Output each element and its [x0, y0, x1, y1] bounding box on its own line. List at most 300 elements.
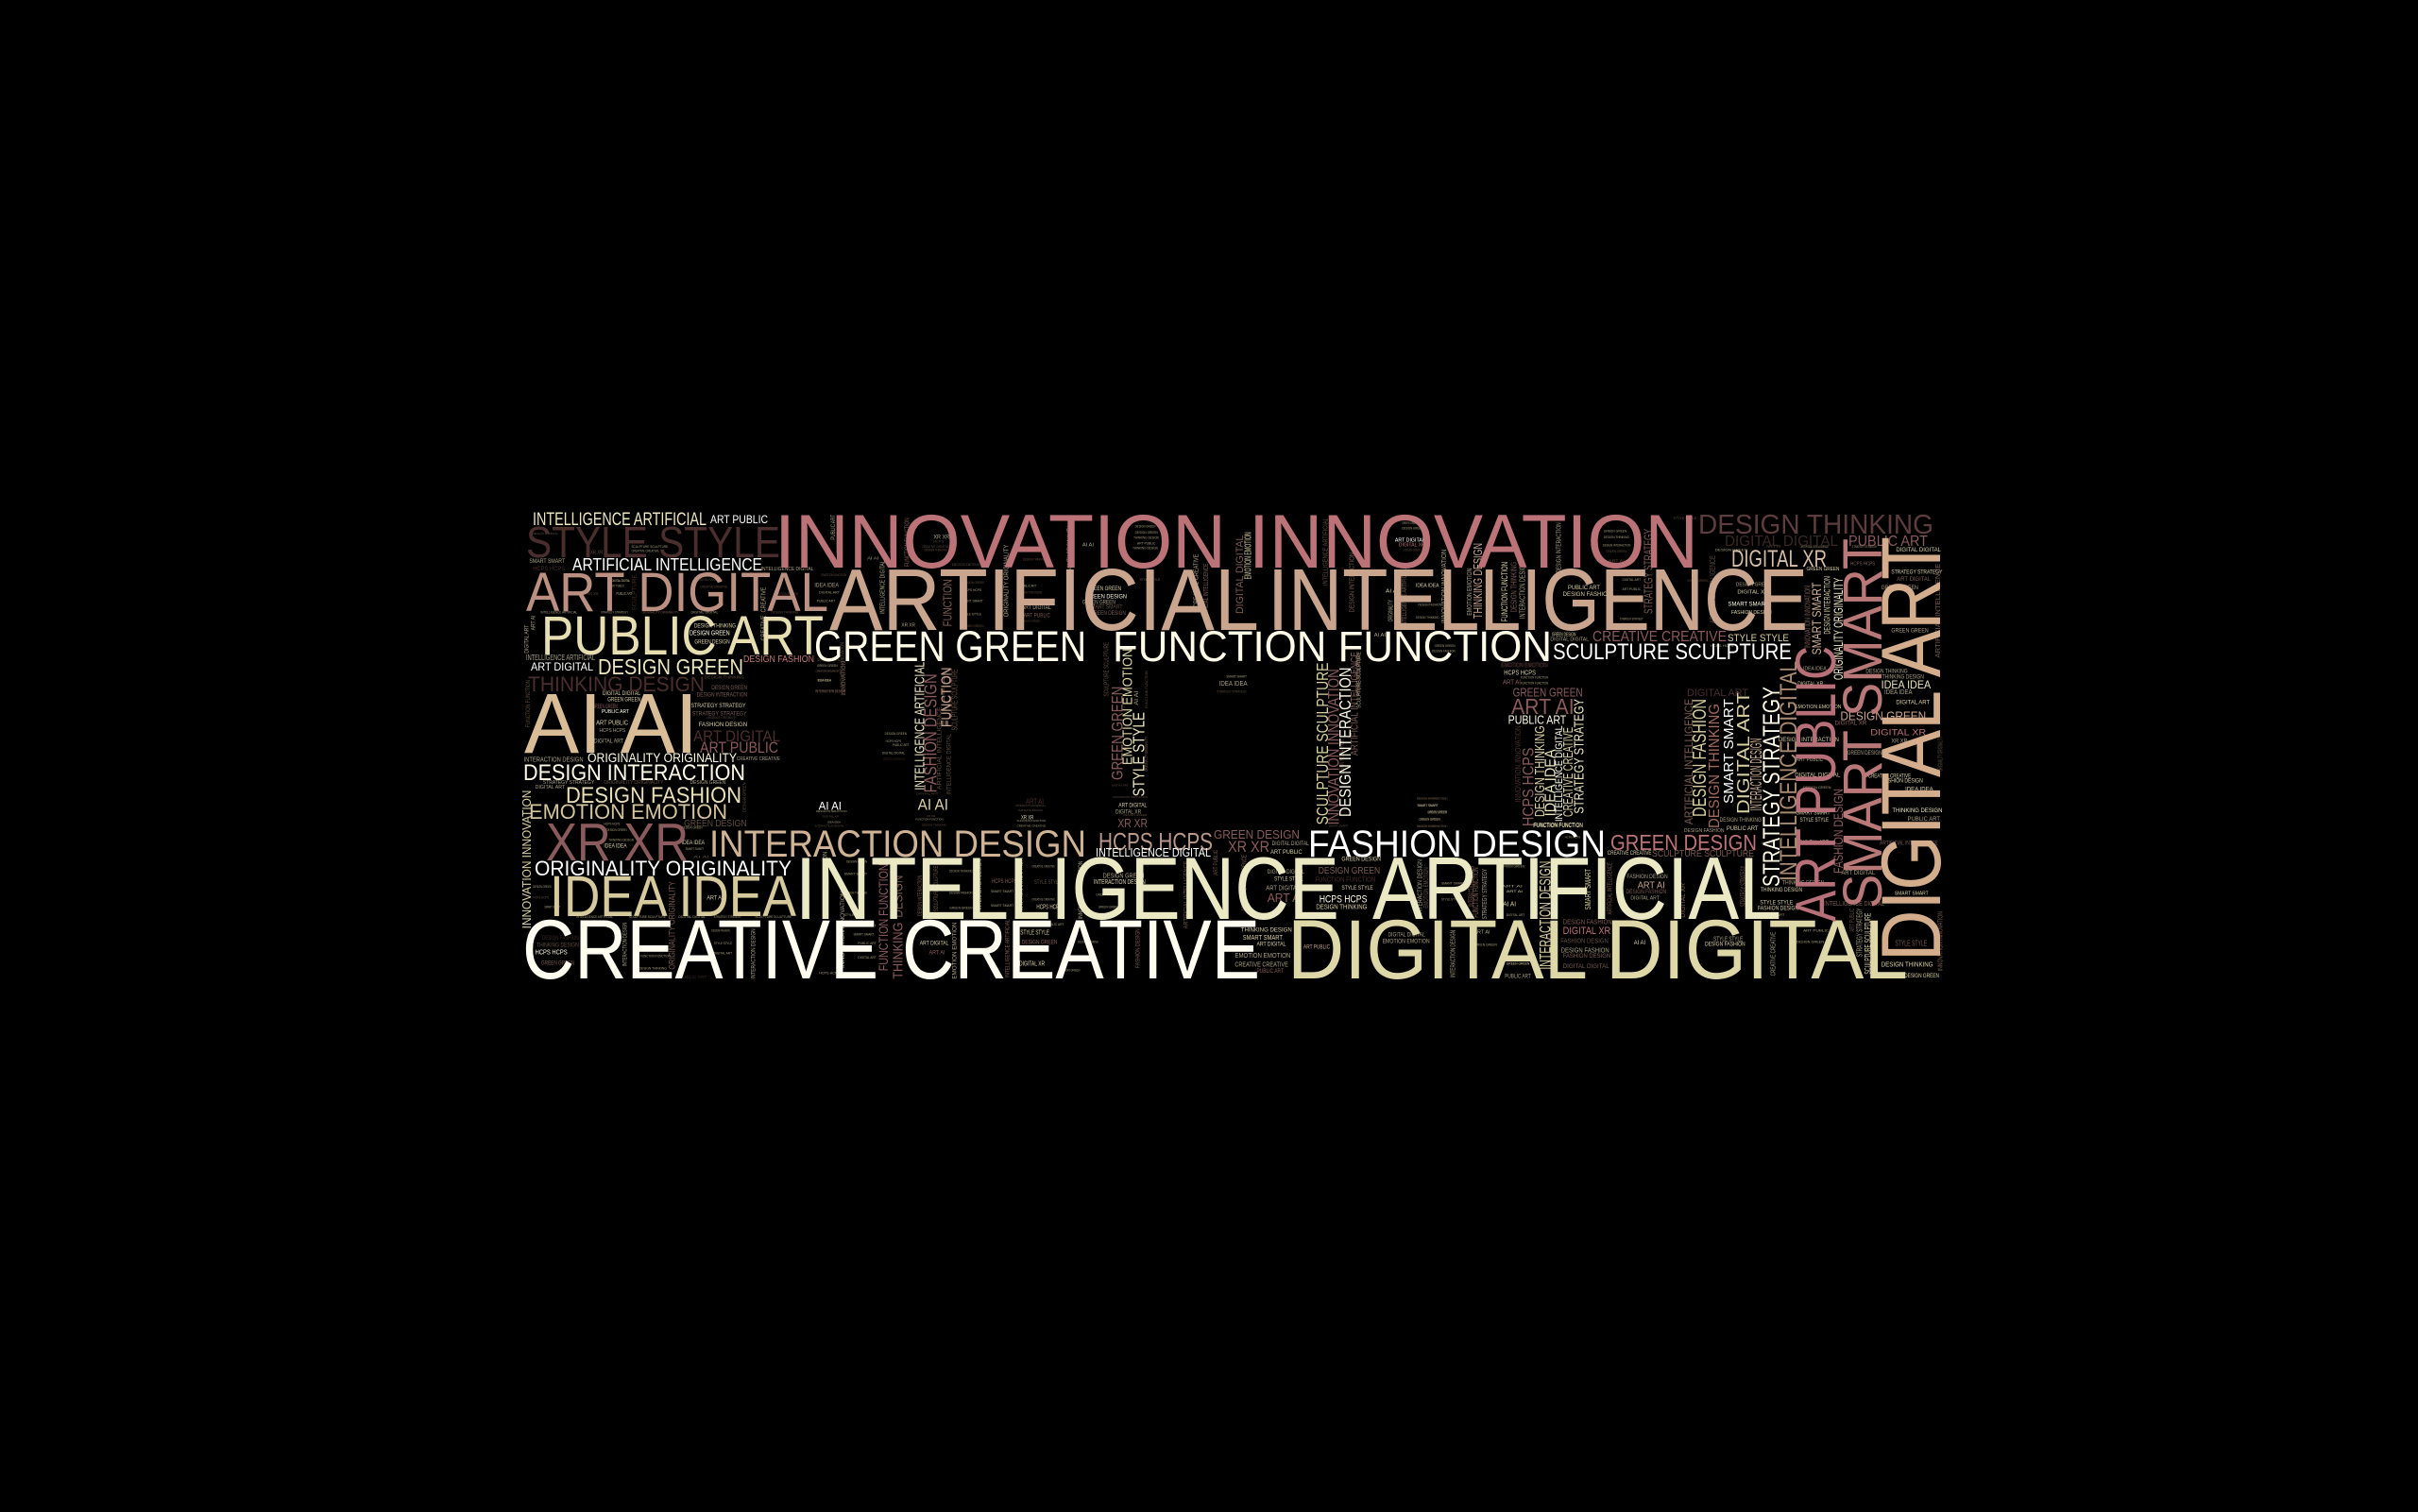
small filler words: bottom left region: ART DIGITAL: [920, 939, 949, 946]
small filler words: bottom right region: DIGITAL DIGITAL: [1388, 930, 1425, 938]
small filler words: top left region: DESIGN GREEN: [1135, 524, 1155, 528]
small filler words: top left region: DIGITAL ART: [819, 590, 840, 595]
small filler words: top right region: EMOTION EMOTION: [1795, 704, 1841, 710]
small filler words: bottom left region: DESIGN THINKING: [1078, 940, 1098, 943]
small filler words: bottom left region: DIGITAL DIGITAL: [678, 915, 707, 919]
small filler words: top right region: AI AI: [1386, 588, 1399, 594]
small filler words: bottom left region: INNOVATION INNOVATION: [1018, 858, 1025, 918]
middle vertical columns: left of shape: GREEN DESIGN: [883, 757, 905, 761]
middle vertical columns: left of shape: [815, 642, 1149, 830]
middle vertical columns: left of shape: FUNCTION FUNCTION: [915, 818, 944, 822]
small filler words: bottom right region: SMART SMART: [1441, 881, 1465, 885]
small filler words: bottom left region: SMART SMART: [854, 932, 875, 936]
vertical word: SMART SMART small: SMART SMART: [1721, 699, 1737, 804]
small filler words: bottom right region: INTERACTION DESIGN: [1418, 859, 1424, 914]
small filler words: bottom left region: [520, 756, 1219, 980]
small filler words: top left region: EMOTION EMOTION: [822, 573, 846, 577]
small filler words: top left region: ORIGINALITY ORIGINALITY: [642, 610, 679, 614]
small filler words: bottom right region: CREATIVE CREATIVE: [1235, 960, 1288, 968]
middle vertical columns: left of shape: INTERACTION DESIGN: [815, 824, 843, 828]
word: IDEA IDEA: IDEA IDEA: [550, 864, 796, 928]
small filler words: top right region: DESIGN GREEN: [1715, 548, 1747, 552]
small filler words: top right region: ORIGINALITY: [1388, 600, 1395, 621]
small filler words: top right region: INTERACTION DESIGN: [1520, 562, 1527, 619]
small filler words: bottom right region: INTERACTION DESIGN: [1468, 866, 1476, 907]
small filler words: top left region: AI AI: [867, 555, 878, 561]
small filler words: top right region: GREEN GREEN: [1604, 529, 1626, 533]
middle vertical columns: right of shape: INTELLIGENCE DIGITAL: [1554, 725, 1565, 822]
word: DIGITAL DIGITAL dim: DIGITAL DIGITAL: [1725, 534, 1838, 550]
small filler words: top right region: DIGITAL XR: [1399, 542, 1425, 548]
word: ARTIFICIAL: ARTIFICIAL: [829, 551, 1259, 649]
small filler words: top left region: ART PUBLIC: [1137, 541, 1155, 545]
small filler words: top left region: DESIGN FASHION: [695, 578, 723, 582]
small filler words: top right region: INNOVATION INNOVATION: [1805, 586, 1813, 649]
small filler words: bottom right region: CREATIVE CREATIVE: [1608, 849, 1651, 857]
word: CREATIVE CREATIVE top right: CREATIVE CREATIVE: [1592, 629, 1727, 645]
small filler words: top left region: HCPS HCPS: [600, 728, 625, 734]
small filler words: bottom right region: XR XR: [1761, 841, 1775, 845]
small filler words: top left region: GREEN GREEN: [592, 703, 618, 710]
small filler words: top right region: DESIGN INTERACTION: [1603, 543, 1630, 547]
middle vertical columns: right of shape: DESIGN INTERACTION: [1417, 824, 1448, 828]
small filler words: bottom right region: ORIGINALITY ORIGINALITY: [1938, 737, 1945, 772]
word: PUBLIC ART top right: PUBLIC ART: [1848, 534, 1928, 550]
middle vertical columns: left of shape: HCPS HCPS: [886, 739, 902, 743]
small filler words: top left region: HCPS HCPS: [533, 565, 565, 572]
word: THINKING DESIGN: THINKING DESIGN: [528, 672, 705, 696]
word: DIGITAL ART dim horizontal: DIGITAL ART: [1687, 688, 1748, 699]
middle vertical columns: left of shape: DESIGN THINKING: [922, 824, 947, 827]
small filler words: top right region: GREEN GREEN: [1807, 566, 1839, 572]
small filler words: top right region: STYLE STYLE: [1674, 517, 1696, 520]
word: INTERACTION DESIGN: INTERACTION DESIGN: [709, 824, 1086, 865]
small filler words: top left region: DIGITAL ART: [524, 624, 531, 654]
small filler words: top right region: ART AI: [1766, 545, 1781, 550]
small filler words: bottom right region: DIGITAL XR: [1563, 925, 1610, 936]
small filler words: bottom right region: GREEN GREEN: [1473, 943, 1497, 946]
small filler words: top left region: IDEA IDEA: [818, 678, 831, 682]
small filler words: bottom left region: SCULPTURE SCULPTURE: [934, 866, 941, 911]
middle vertical columns: left of shape: XR XR: [1117, 816, 1148, 830]
middle vertical columns: right of shape: ART AI: [1503, 677, 1521, 686]
small filler words: top left region: SMART SMART: [961, 599, 983, 603]
small filler words: top left region: GREEN GREEN: [1087, 585, 1121, 592]
small filler words: bottom right region: DIGITAL XR: [1680, 883, 1687, 918]
small filler words: bottom left region: DESIGN: [891, 875, 906, 918]
small filler words: bottom right region: INNOVATION INNOVATION: [1938, 911, 1945, 971]
small filler words: top right region: DESIGN THINKING: [1416, 616, 1439, 620]
small filler words: bottom right region: DIGITAL ART: [1630, 896, 1660, 901]
small filler words: bottom right region: INTERACTION DESIGN: [1747, 739, 1766, 810]
small filler words: top left region: ART PUBLIC: [596, 719, 628, 726]
small filler words: bottom left region: INTELLIGENCE ARTIFICIAL: [576, 915, 613, 919]
small filler words: top left region: PUBLIC ART: [616, 592, 633, 597]
middle vertical columns: right of shape: STRATEGY STRATEGY: [1217, 689, 1247, 693]
small filler words: bottom left region: DESIGN FASHION: [949, 891, 973, 894]
small filler words: top right region: IDEA IDEA: [1882, 679, 1931, 691]
small filler words: top left region: XR XR: [590, 551, 603, 555]
small filler words: top right region: GREEN GREEN: [1687, 579, 1708, 583]
middle vertical columns: left of shape: CREATIVE CREATIVE: [815, 670, 839, 673]
small filler words: bottom right region: DESIGN THINKING: [1882, 960, 1933, 968]
small filler words: bottom right region: FASHION DESIGN: [1758, 905, 1798, 911]
small filler words: top right region: STRATEGY STRATEGY: [1643, 528, 1656, 614]
word: ART DIGITAL dim: ART DIGITAL: [693, 727, 780, 745]
middle vertical columns: left of shape: ORIGINALITY ORIGINALITY: [1144, 737, 1149, 772]
middle vertical columns: right of shape: HCPS HCPS: [1504, 668, 1536, 676]
middle vertical columns: left of shape: GREEN GREEN: [1108, 687, 1126, 780]
small filler words: top right region: DIGITAL DIGITAL: [1550, 637, 1589, 642]
word: INTELLIGENCE DIGITAL: INTELLIGENCE DIGITAL: [1096, 845, 1211, 859]
small filler words: top left region: THINKING DESIGN: [1132, 546, 1158, 550]
small filler words: top left region: DESIGN THINKING: [996, 573, 1003, 617]
small filler words: bottom left region: DIGITAL XR: [1019, 960, 1045, 967]
small filler words: top right region: THINKING DESIGN: [1882, 673, 1924, 680]
small filler words: top left region: CREATIVE CREATIVE: [922, 545, 949, 549]
middle vertical columns: left of shape: AI AI: [819, 799, 842, 812]
small filler words: top left region: DESIGN THINKING: [694, 621, 736, 629]
vertical word: SMART SMART: SMART SMART: [1832, 538, 1894, 909]
small filler words: top right region: ORIGINALITY ORIGINALITY: [1831, 578, 1846, 680]
small filler words: bottom left region: THINKING DESIGN: [608, 838, 634, 841]
small filler words: top right region: ART AI: [1609, 559, 1625, 563]
middle vertical columns: left of shape: INTERACTION DESIGN: [1015, 804, 1046, 807]
middle vertical columns: left of shape: DIGITAL ART: [916, 792, 939, 796]
small filler words: bottom right region: SMART SMART: [1895, 892, 1929, 896]
small filler words: bottom right region: ART AI: [1502, 884, 1523, 888]
small filler words: bottom right region: ARTIFICIAL INTELLIGENCE: [1880, 840, 1938, 846]
small filler words: top right region: INTELLIGENCE ARTIFICIAL: [1402, 568, 1408, 626]
small filler words: bottom right region: FASHION DESIGN: [1626, 873, 1668, 880]
word: XR XR small: XR XR: [1228, 838, 1269, 856]
small filler words: top left region: ART PUBLIC: [611, 584, 624, 587]
small filler words: bottom right region: FUNCTION FUNCTION: [1315, 875, 1375, 883]
small filler words: bottom right region: GREEN GREEN: [1507, 961, 1529, 965]
small filler words: top right region: DIGITAL ART: [1896, 699, 1930, 705]
small filler words: bottom right region: DIGITAL DIGITAL: [1272, 840, 1309, 847]
middle vertical columns: left of shape: DIGITAL DIGITAL: [882, 751, 905, 755]
small filler words: top left region: DIGITAL DIGITAL: [603, 689, 640, 697]
small filler words: bottom right region: STRATEGY STRATEGY: [1741, 865, 1748, 907]
middle vertical columns: left of shape: DESIGN INTERACTION: [816, 809, 847, 813]
word: ORIGINALITY ORIGINALITY white: ORIGINALITY ORIGINALITY: [535, 857, 792, 880]
small filler words: top right region: DESIGN INTERACTION: [1822, 576, 1832, 635]
small filler words: bottom right region: INTERACTION DESIGN: [1451, 930, 1457, 977]
small filler words: bottom right region: THINKING DESIGN: [1241, 926, 1292, 933]
small filler words: bottom left region: DIGITAL ART: [854, 924, 877, 927]
small filler words: top right region: THINKING DESIGN: [1473, 543, 1486, 619]
small filler words: top left region: INTERACTION DESIGN: [1019, 590, 1042, 594]
small filler words: bottom right region: DIGITAL ART: [1762, 913, 1785, 917]
word: HCPS HCPS: HCPS HCPS: [1098, 827, 1213, 856]
small filler words: bottom right region: DESIGN GREEN: [1803, 786, 1831, 790]
middle vertical columns: right of shape: FUNCTION FUNCTION: [1521, 682, 1549, 686]
small filler words: top left region: CREATIVE CREATIVE: [1193, 553, 1200, 607]
small filler words: bottom right region: ART AI: [1268, 891, 1303, 905]
small filler words: bottom right region: FASHION DESIGN: [1882, 777, 1923, 784]
middle vertical columns: left of shape: GREEN GREEN: [817, 664, 838, 668]
vertical word: INTELLIGENCE DIGITAL: INTELLIGENCE DIGITAL: [1776, 661, 1802, 881]
small filler words: top left region: FUNCTION FUNCTION: [904, 518, 911, 567]
word: DESIGN FASHION large: DESIGN FASHION: [566, 783, 741, 808]
middle vertical columns: left of shape: IDEA IDEA: [817, 679, 832, 683]
small filler words: top left region: DESIGN THINKING: [705, 675, 745, 680]
small filler words: bottom left region: DESIGN GREEN: [690, 780, 725, 786]
small filler words: bottom right region: STYLE STYLE: [1341, 884, 1373, 892]
small filler words: bottom left region: DESIGN GREEN: [1103, 872, 1144, 879]
small filler words: top left region: ART DIGITAL: [1022, 603, 1051, 611]
small filler words: bottom right region: ART AI: [1852, 790, 1868, 794]
small filler words: bottom left region: DESIGN GREEN: [682, 825, 703, 829]
small filler words: bottom left region: THINKING: [891, 923, 906, 979]
small filler words: bottom right region: AI AI: [1503, 900, 1516, 908]
small filler words: bottom left region: IDEA IDEA: [604, 842, 627, 849]
small filler words: bottom right region: STYLE STYLE: [1760, 899, 1793, 906]
small filler words: top right region: GREEN GREEN: [1405, 548, 1421, 552]
word: AI AI: AI AI: [524, 677, 698, 772]
small filler words: top left region: INTELLIGENCE DIGITAL: [879, 560, 887, 614]
small filler words: top left region: CREATIVE CREATIVE: [631, 549, 659, 552]
middle vertical columns: left of shape: ARTIFICIAL INTELLIGENCE: [937, 706, 944, 790]
small filler words: top left region: STRATEGY STRATEGY: [692, 709, 747, 717]
small filler words: bottom left region: STRATEGY STRATEGY: [543, 780, 594, 786]
small filler words: bottom right region: STYLE STYLE: [1713, 935, 1743, 943]
small filler words: bottom left region: ARTIFICIAL INTELLIGENCE: [1183, 861, 1190, 928]
small filler words: bottom right region: DESIGN INTERACTION: [1339, 739, 1346, 774]
small filler words: bottom right region: ARTIFICIAL INTELLIGENCE: [1242, 855, 1249, 911]
small filler words: bottom left region: SMART SMART: [991, 890, 1014, 893]
small filler words: bottom right region: DIGITAL ART: [1799, 839, 1829, 846]
word: GREEN DESIGN dim: GREEN DESIGN: [1214, 827, 1300, 841]
small filler words: bottom left region: DESIGN FASHION: [542, 934, 579, 942]
small filler words: top left region: GREEN GREEN: [607, 696, 640, 703]
small filler words: bottom left region: ART AI: [929, 948, 945, 956]
middle vertical columns: left of shape: DIGITAL ART: [1112, 784, 1129, 788]
small filler words: bottom right region: ART PUBLIC: [1803, 928, 1829, 932]
small filler words: bottom right region: ART DIGITAL: [1266, 884, 1300, 892]
small filler words: bottom right region: THINKING DESIGN: [1892, 807, 1943, 814]
middle vertical columns: right of shape: [1217, 652, 1588, 839]
small filler words: bottom left region: DIGITAL ART: [714, 951, 732, 955]
small filler words: top left region: THINKING DESIGN: [1133, 535, 1159, 539]
small filler words: bottom right region: GREEN DESIGN: [1341, 856, 1381, 862]
middle vertical columns: right of shape: PUBLIC ART: [1508, 714, 1567, 727]
middle vertical columns: right of shape: DESIGN THINKING: [1533, 725, 1548, 817]
small filler words: top right region: FUNCTION FUNCTION: [1500, 562, 1510, 621]
small filler words: top left region: DESIGN GREEN: [1135, 531, 1158, 535]
small filler words: bottom left region: STYLE STYLE: [844, 913, 865, 918]
middle vertical columns: left of shape: SCULPTURE SCULPTURE: [1101, 642, 1110, 696]
middle vertical columns: left of shape: DIGITAL XR: [823, 815, 840, 819]
small filler words: bottom right region: AI AI: [1634, 939, 1645, 946]
small filler words: top left region: DIGITAL DIGITAL: [690, 610, 719, 614]
small filler words: bottom right region: GREEN DESIGN: [1893, 821, 1929, 828]
small filler words: bottom right region: [1235, 737, 1945, 979]
middle vertical columns: right of shape: SMART SMART: [1226, 675, 1247, 679]
small filler words: bottom left region: CREATIVE CREATIVE: [1032, 897, 1055, 901]
small filler words: top left region: PUBLIC ART: [830, 515, 837, 540]
small filler words: top left region: DESIGN GREEN: [711, 684, 747, 691]
small filler words: bottom right region: DESIGN FASHION: [1561, 946, 1609, 954]
small filler words: top right region: DESIGN INTERACTION: [1557, 522, 1563, 573]
small filler words: top right region: GREEN GREEN: [1606, 550, 1626, 553]
small filler words: bottom right region: ART PUBLIC: [1849, 908, 1856, 932]
small filler words: bottom right region: EMOTION EMOTION: [1383, 937, 1430, 944]
small filler words: top left region: PUBLIC ART: [1020, 584, 1037, 587]
small filler words: bottom left region: CREATIVE CREATIVE: [737, 756, 780, 762]
small filler words: bottom left region: STRATEGY STRATEGY: [714, 915, 741, 919]
small filler words: bottom left region: IDEA IDEA: [682, 839, 705, 846]
small filler words: bottom left region: STYLE STYLE: [1020, 928, 1049, 936]
small filler words: bottom right region: FASHION DESIGN: [1560, 937, 1609, 944]
small filler words: bottom right region: DESIGN GREEN: [1319, 865, 1380, 875]
small filler words: top right region: INNOVATION INNOVATION: [1441, 550, 1448, 623]
small filler words: top left region: HCPS: [933, 539, 944, 543]
small filler words: bottom left region: STYLE STYLE: [714, 942, 732, 945]
middle vertical columns: right of shape: INNOVATION INNOVATION: [1513, 725, 1523, 802]
small filler words: top left region: ART AI: [531, 615, 537, 630]
middle vertical columns: right of shape: IDEA IDEA: [1543, 749, 1559, 816]
small filler words: top right region: IDEA IDEA: [1884, 688, 1913, 696]
middle vertical columns: right of shape: IDEA IDEA: [1219, 679, 1248, 688]
middle vertical columns: right of shape: HCPS HCPS: [1565, 835, 1580, 839]
small filler words: bottom right region: SMART SMART: [1243, 934, 1283, 942]
small filler words: top left region: FASHION DESIGN: [699, 721, 747, 728]
small filler words: top left region: DESIGN THINKING: [1023, 557, 1046, 561]
word: ART PUBLIC top: ART PUBLIC: [710, 513, 768, 526]
small filler words: bottom right region: ART DIGITAL: [1841, 869, 1876, 876]
small filler words: top right region: DIGITAL ART: [1907, 553, 1941, 561]
small filler words: bottom left region: DESIGN THINKING: [844, 891, 867, 894]
word: INTELLIGENCE ARTIFICIAL dim: INTELLIGENCE ARTIFICIAL: [526, 654, 595, 662]
small filler words: bottom left region: EMOTION EMOTION: [952, 923, 959, 979]
small filler words: bottom right region: ART AI: [1473, 929, 1490, 935]
small filler words: top left region: DESIGN THINKING: [533, 533, 558, 535]
middle vertical columns: left of shape: INTELLIGENCE DIGITAL: [946, 733, 953, 795]
word: CREATIVE 2: CREATIVE: [902, 902, 1260, 996]
small filler words: bottom right region: STRATEGY STRATEGY: [1857, 908, 1865, 957]
small filler words: bottom left region: PUBLIC ART: [679, 976, 707, 980]
small filler words: bottom left region: DESIGN INTERACTION: [918, 875, 925, 916]
small filler words: bottom right region: PUBLIC ART: [1256, 967, 1284, 975]
small filler words: bottom right region: ARTIFICIAL INTELLIGENCE: [1608, 862, 1614, 914]
small filler words: top left region: GREEN DESIGN: [1091, 609, 1126, 617]
small filler words: bottom left region: DESIGN GREEN: [606, 828, 627, 832]
small filler words: bottom left region: INTERACTION DESIGN: [1094, 878, 1146, 886]
small filler words: bottom right region: DIGITAL DIGITAL: [1563, 962, 1609, 970]
small filler words: bottom right region: GREEN GREEN: [1502, 864, 1524, 868]
small filler words: bottom left region: PUBLIC ART: [858, 942, 877, 945]
middle vertical columns: left of shape: XR XR: [1021, 814, 1033, 821]
small filler words: top right region: DESIGN GREEN: [1402, 526, 1422, 530]
word: ARTIFICIAL bottom: ARTIFICIAL: [1372, 839, 1781, 938]
small filler words: bottom right region: ART PUBLIC: [1270, 848, 1303, 856]
small filler words: top left region: XR XR: [901, 622, 915, 628]
small filler words: bottom right region: ART PUBLIC: [1796, 756, 1824, 763]
small filler words: bottom right region: THINKING DESIGN: [1761, 886, 1802, 893]
small filler words: bottom right region: FASHION DESIGN: [1831, 789, 1846, 874]
word: STYLE STYLE: STYLE STYLE: [526, 518, 780, 567]
small filler words: top right region: GREEN DESIGN: [1552, 632, 1575, 637]
word: SCULPTURE SCULPTURE dim: SCULPTURE SCULPTURE: [1652, 849, 1754, 859]
small filler words: bottom right region: DIGITAL ART: [1507, 913, 1525, 917]
small filler words: bottom left region: INTERACTION DESIGN: [978, 859, 984, 909]
small filler words: bottom right region: ART DIGITAL: [1256, 940, 1286, 947]
small filler words: bottom right region: STYLE STYLE: [1274, 875, 1303, 882]
small filler words: top left region: HCPS HCPS: [963, 588, 981, 592]
small filler words: top left region: CREATIVE CREATIVE: [700, 585, 727, 588]
small filler words: bottom left region: AI AI: [693, 855, 709, 858]
small filler words: bottom left region: HCPS HCPS: [533, 895, 549, 899]
middle vertical columns: left of shape: FUNCTION FUNCTION: [1144, 671, 1149, 708]
small filler words: top right region: ART PUBLIC: [1623, 587, 1641, 591]
middle vertical columns: right of shape: GREEN GREEN: [1428, 810, 1448, 814]
small filler words: top left region: DESIGN GREEN: [1022, 620, 1040, 622]
word: PUBLIC ART: PUBLIC ART: [541, 605, 824, 667]
vertical word: DESIGN FASHION: DESIGN FASHION: [1690, 699, 1711, 817]
small filler words: top right region: STRATEGY STRATEGY: [1620, 617, 1643, 620]
small filler words: bottom left region: HCPS HCPS: [819, 971, 840, 975]
small filler words: bottom right region: DIGITAL DIGITAL: [1268, 868, 1304, 875]
small filler words: top left region: DESIGN INTERACTION: [697, 691, 747, 698]
small filler words: top right region: STRATEGY STRATEGY: [1852, 545, 1878, 549]
small filler words: bottom right region: INTERACTION DESIGN: [1537, 861, 1555, 970]
small filler words: bottom left region: DIGITAL ART: [858, 956, 877, 960]
small filler words: top left region: DESIGN GREEN: [961, 624, 984, 628]
word: GREEN GREEN: GREEN GREEN: [814, 622, 1086, 671]
small filler words: bottom left region: ORIGINALITY ORIGINALITY: [604, 780, 664, 786]
small filler words: top right region: DIGITAL ART: [1623, 578, 1642, 582]
middle vertical columns: right of shape: SCULPTURE SCULPTURE: [1357, 652, 1363, 708]
small filler words: bottom right region: FUNCTION FUNCTION: [1534, 822, 1583, 828]
small filler words: bottom right region: DESIGN GREEN: [1904, 972, 1939, 979]
small filler words: bottom left region: INTERACTION DESIGN: [622, 923, 629, 966]
vertical word: STRATEGY STRATEGY: STRATEGY STRATEGY: [1759, 687, 1785, 887]
middle vertical columns: right of shape: SCULPTURE SCULPTURE: [1313, 663, 1332, 824]
middle vertical columns: right of shape: STRATEGY STRATEGY: [1573, 699, 1588, 814]
small filler words: bottom left region: PUBLIC ART: [1046, 923, 1064, 926]
middle vertical columns: left of shape: INNOVATION INNOVATION: [1113, 795, 1148, 799]
small filler words: bottom left region: INNOVATION INNOVATION: [1078, 861, 1084, 919]
word: INTELLIGENCE: INTELLIGENCE: [1268, 551, 1808, 649]
small filler words: bottom right region: FASHION DESIGN: [1563, 952, 1610, 960]
middle vertical columns: left of shape: XR XR: [927, 814, 936, 818]
small filler words: top left region: SCULPTURE SCULPTURE: [631, 545, 668, 549]
word: ARTIFICIAL INTELLIGENCE white: ARTIFICIAL INTELLIGENCE: [572, 555, 762, 574]
middle vertical columns: right of shape: INNOVATION INNOVATION: [1325, 669, 1343, 824]
small filler words: bottom left region: GREEN GREEN: [949, 906, 973, 909]
small filler words: bottom right region: ART AI: [1507, 890, 1523, 893]
small filler words: top left region: STRATEGY STRATEGY: [690, 702, 746, 709]
small filler words: top right region: ARTIFICIAL INTELLIGENCE: [1935, 564, 1942, 658]
small filler words: bottom right region: PUBLIC ART: [1908, 815, 1940, 823]
word: DIGITAL 2: DIGITAL: [1606, 902, 1908, 996]
small filler words: bottom left region: FUNCTION FUNCTION: [640, 954, 671, 958]
small filler words: top left region: STYLE STYLE: [1139, 578, 1161, 583]
small filler words: bottom right region: FUNCTION FUNCTION: [1473, 867, 1481, 918]
small filler words: bottom left region: HCPS HCPS: [604, 822, 620, 825]
small filler words: bottom right region: CREATIVE CREATIVE: [1771, 932, 1778, 976]
word: INTELLIGENCE bottom: INTELLIGENCE: [795, 839, 1339, 938]
small filler words: top right region: DIGITAL XR: [1797, 680, 1824, 688]
small filler words: top left region: ART PUBLIC: [1024, 612, 1050, 619]
middle vertical columns: right of shape: FUNCTION FUNCTION: [1533, 823, 1583, 829]
small filler words: bottom left region: GREEN GREEN: [1096, 892, 1116, 896]
small filler words: bottom left region: DESIGN FASHION: [711, 928, 730, 932]
small filler words: top right region: DIGITAL XR: [1834, 720, 1867, 726]
small filler words: top left region: EMOTION EMOTION: [775, 592, 798, 596]
